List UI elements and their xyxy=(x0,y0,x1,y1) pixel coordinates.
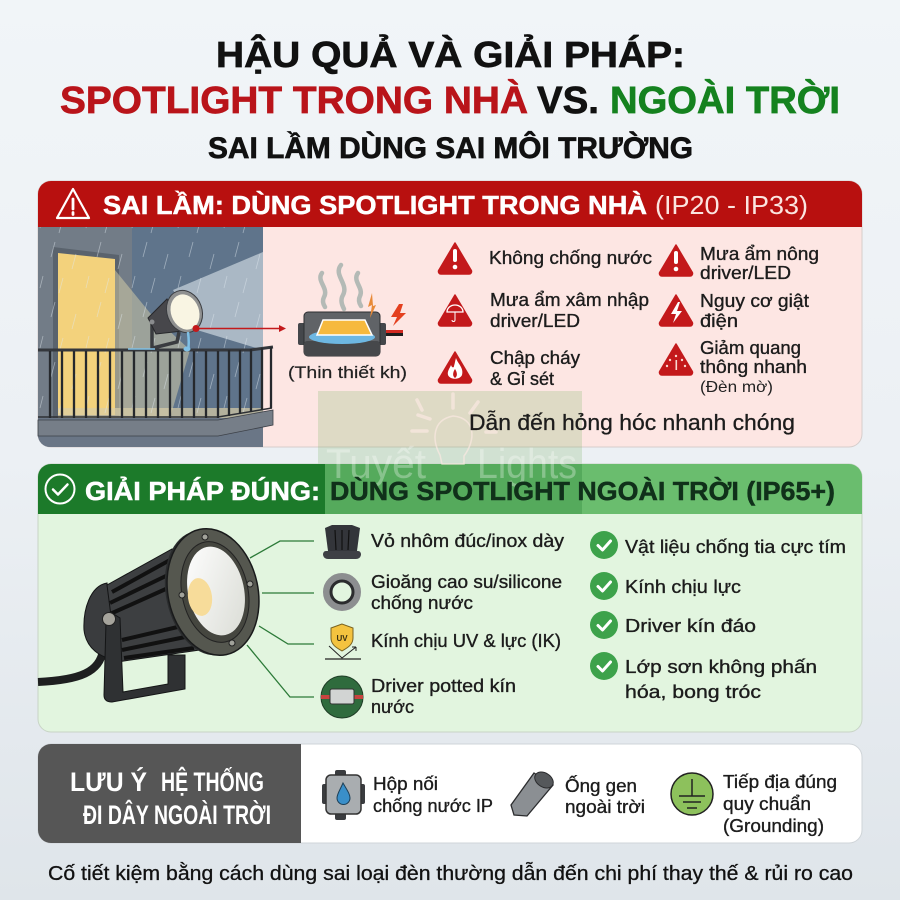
item: junction box: Hộp nối xyxy=(373,774,438,794)
note label: LƯU Ý xyxy=(70,766,147,797)
footer note: Cố tiết kiệm bằng cách dùng sai loại đèn thường dẫn đến chi phí thay thế & rủi ro cao xyxy=(48,862,853,885)
benefit: sealed driver xyxy=(590,611,756,639)
risk: moisture ingress: driver/LED xyxy=(490,311,580,331)
risk: moisture ingress: Mưa ẩm xâm nhập xyxy=(490,290,649,310)
conclusion text: Dẫn đến hỏng hóc nhanh chóng xyxy=(469,410,795,435)
feature: UV glass: UV xyxy=(336,634,348,643)
watermark tint xyxy=(318,391,582,464)
header text: mistake: (IP20 - IP33) xyxy=(655,190,808,220)
risk: electric shock: Nguy cơ giật xyxy=(700,291,809,311)
risk: lumen decay xyxy=(660,338,807,396)
leader lines xyxy=(247,541,314,697)
feature: potted driver: nước xyxy=(371,697,414,717)
risk: electric shock: điện xyxy=(700,311,738,331)
risk: moisture heats driver xyxy=(660,244,819,283)
feature: aluminium housing xyxy=(323,525,564,559)
title: SAI LẦM DÙNG SAI MÔI TRƯỜNG xyxy=(208,131,693,165)
item: junction box xyxy=(322,770,493,820)
risk: short circuit and rust xyxy=(438,348,580,389)
benefit: sealed driver: Driver kín đáo xyxy=(625,616,756,636)
benefit: paint: Lớp sơn không phấn xyxy=(625,657,817,677)
risk: moisture heats driver: driver/LED xyxy=(700,263,791,283)
feature: UV glass: Kính chịu UV & lực (IK) xyxy=(371,631,561,651)
note label xyxy=(38,744,301,843)
benefit: strong glass: Kính chịu lực xyxy=(625,577,741,597)
panel: mistake xyxy=(38,181,862,447)
risk: lumen decay: (Đèn mờ) xyxy=(700,379,773,396)
illustration: damaged driver xyxy=(298,265,406,356)
illustration: outdoor spotlight xyxy=(38,520,270,702)
title xyxy=(60,33,840,165)
item: grounding: (Grounding) xyxy=(723,816,824,836)
panel: solution xyxy=(38,464,862,732)
caption: driver: (Thin thiết kh) xyxy=(288,363,407,382)
item: grounding: quy chuẩn xyxy=(723,794,811,814)
watermark: Lights xyxy=(477,440,577,487)
benefit: paint: hóa, bong tróc xyxy=(625,682,761,702)
title: VS. xyxy=(537,80,599,122)
title: HẬU QUẢ VÀ GIẢI PHÁP: xyxy=(216,33,685,75)
feature: gasket: Gioăng cao su/silicone xyxy=(371,572,562,592)
risk: not waterproof: Không chống nước xyxy=(489,248,652,268)
risk list xyxy=(438,243,819,396)
watermark: Tuyết xyxy=(326,440,426,487)
icon: warning xyxy=(57,189,89,218)
feature: aluminium housing: Vỏ nhôm đúc/inox dày xyxy=(371,531,564,551)
header text: mistake: SAI LẦM: DÙNG SPOTLIGHT TRONG NHÀ xyxy=(103,190,647,220)
risk: moisture heats driver: Mưa ẩm nông xyxy=(700,244,819,264)
title: SPOTLIGHT TRONG NHÀ xyxy=(60,78,528,122)
lamp xyxy=(128,285,208,352)
panel: wiring note xyxy=(38,744,862,843)
benefit list xyxy=(590,531,846,702)
risk: electric shock xyxy=(660,291,809,331)
item: conduit: ngoài trời xyxy=(565,797,645,817)
feature: gasket: chống nước xyxy=(371,593,473,613)
item: grounding xyxy=(671,772,837,836)
risk: short circuit and rust: & Gỉ sét xyxy=(490,369,554,389)
item: conduit xyxy=(511,769,645,817)
header text: solution: DÙNG SPOTLIGHT NGOÀI TRỜI (IP65+) xyxy=(330,476,835,506)
panel header: mistake xyxy=(38,181,862,227)
item: grounding: Tiếp địa đúng xyxy=(723,772,837,792)
arrow xyxy=(192,325,286,332)
risk: lumen decay: Giảm quang xyxy=(700,338,801,358)
item: conduit: Ống gen xyxy=(565,775,637,796)
risk: short circuit and rust: Chập cháy xyxy=(490,348,580,368)
benefit: paint xyxy=(590,652,817,702)
note label: HỆ THỐNG xyxy=(161,765,264,797)
feature: potted driver: Driver potted kín xyxy=(371,676,516,696)
icon: check circle xyxy=(46,474,74,504)
benefit: strong glass xyxy=(590,572,741,600)
risk: lumen decay: thông nhanh xyxy=(700,357,807,377)
feature: potted driver xyxy=(321,676,516,718)
panel header: solution xyxy=(38,464,862,514)
risk: not waterproof xyxy=(438,243,652,274)
watermark xyxy=(326,394,577,487)
illustration: rainy balcony with indoor spotlight xyxy=(38,227,286,447)
item: junction box: chống nước IP xyxy=(373,796,493,816)
header text: solution xyxy=(85,476,835,506)
title: NGOÀI TRỜI xyxy=(610,78,840,122)
feature: UV glass xyxy=(325,624,561,659)
benefit: UV material xyxy=(590,531,846,559)
note label: ĐI DÂY NGOÀI TRỜI xyxy=(83,799,271,830)
feature: gasket xyxy=(327,572,562,613)
benefit: UV material: Vật liệu chống tia cực tím xyxy=(625,537,846,557)
risk: moisture ingress xyxy=(438,290,649,331)
header text: solution: GIẢI PHÁP ĐÚNG: xyxy=(85,476,320,506)
